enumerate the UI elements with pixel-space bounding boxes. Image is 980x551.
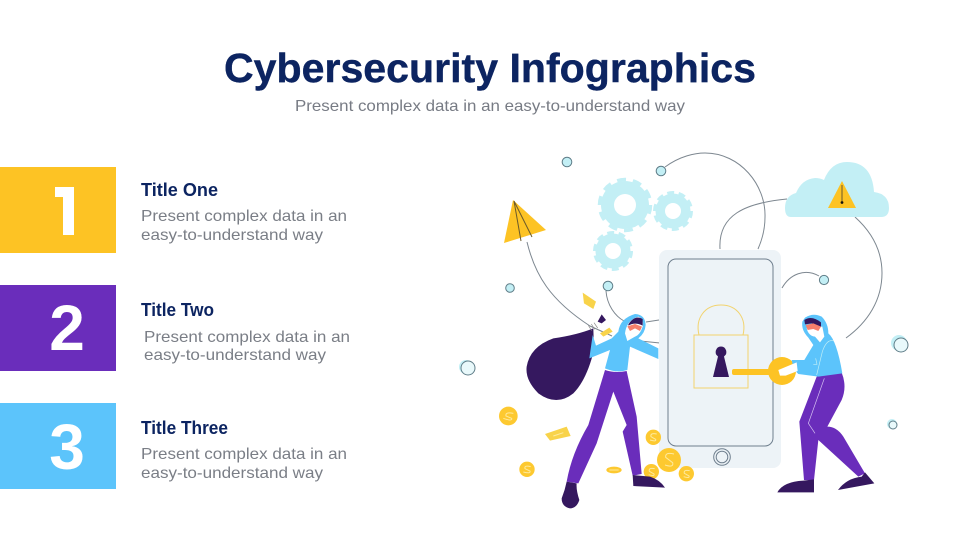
number block 3: 3 (49, 411, 85, 483)
icon: cloud with warning (785, 162, 889, 217)
panel: item three (0, 403, 347, 489)
shoes (777, 472, 874, 492)
coins and bills left (499, 407, 694, 481)
icon: padlock (694, 305, 748, 388)
sweater and hood (778, 315, 842, 377)
text: description one (141, 208, 347, 244)
small nodes (459, 157, 908, 429)
text: description one: easy-to-understand way (141, 227, 323, 244)
number block 3 (0, 403, 116, 489)
icon: medium gear (654, 192, 692, 230)
text: description two: easy-to-understand way (144, 347, 326, 364)
text: description three: easy-to-understand way (141, 465, 323, 482)
panel: item two (0, 285, 350, 371)
money bag (526, 328, 594, 400)
text: description two: Present complex data in an (144, 329, 350, 346)
icon: small gear (594, 232, 632, 270)
text: description two (144, 329, 350, 364)
bag tie and flying bills (583, 293, 613, 337)
title: Cybersecurity Infographics (224, 45, 756, 91)
phone (659, 250, 781, 468)
icon: paper plane (504, 200, 546, 243)
connecting curves (527, 153, 882, 343)
number block 2 (0, 285, 116, 371)
sweater and hood (589, 314, 658, 371)
icon: large gear (600, 180, 650, 230)
text: description three (141, 446, 347, 482)
face (804, 318, 824, 342)
panel: item one (0, 167, 347, 253)
illustration: cybersecurity scene (459, 153, 908, 508)
number block 1: 1 (48, 175, 86, 250)
number block 1 (0, 167, 116, 253)
shoes (562, 475, 665, 508)
text: description three: Present complex data in an (141, 446, 347, 463)
key (732, 357, 796, 385)
defender right (777, 315, 874, 492)
thief left with money bag (526, 293, 665, 508)
text: description one: Present complex data in an (141, 208, 347, 225)
subtitle: Present complex data in an easy-to-understand way (295, 98, 685, 115)
hand (778, 362, 798, 376)
face (625, 317, 643, 341)
heading: title two: Title Two (141, 300, 214, 320)
pants (567, 370, 642, 483)
heading: title three: Title Three (141, 418, 228, 438)
pants (799, 373, 865, 480)
heading: title one: Title One (141, 180, 218, 200)
number block 2: 2 (49, 292, 85, 364)
